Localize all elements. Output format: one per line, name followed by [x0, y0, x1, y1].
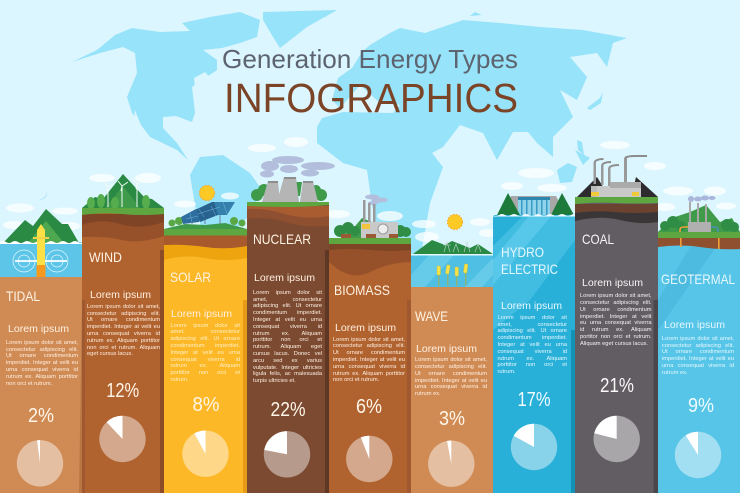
text block: Integer at velit eu urna: [498, 342, 567, 348]
text block: rutrum ex. Aliquam porttitor: [333, 371, 405, 377]
text block: Lorem ipsum dolor sit amet,: [580, 293, 652, 299]
text block: imperdiet. Integer at velit eu: [662, 356, 734, 362]
text block: [6, 340, 78, 387]
panel: coal: [575, 155, 658, 493]
pie chart 22%: [264, 431, 310, 477]
label: WAVE: WAVE: [415, 308, 448, 324]
text block: [415, 357, 487, 397]
text block: [662, 336, 734, 376]
label: WIND: WIND: [89, 249, 122, 265]
text block: Lorem ipsum dolor sit amet,: [333, 337, 405, 343]
text block: turpis ultricies et.: [253, 378, 296, 384]
soil layers: [82, 208, 164, 493]
text block: consectetur adipiscing elit.: [662, 343, 734, 349]
text block: imperdiet. Integer at velit: [580, 314, 652, 320]
percentage: 22%: [270, 399, 306, 421]
text block: eu urna consequat viverra: [580, 320, 652, 326]
text block: ligula felis, ac malesuada: [253, 371, 322, 377]
pie chart 12%: [99, 416, 146, 462]
heading: Generation Energy Types: Generation Energy Types: [222, 44, 518, 74]
text block: Integer at velit eu urna: [170, 350, 240, 356]
soil layers: [575, 197, 658, 493]
text block: consectetur adipiscing elit.: [6, 347, 78, 353]
text block: rutrum ex. Aliquam porttitor: [6, 374, 78, 380]
panel: wind: [82, 174, 164, 493]
scene: sun, hills, water and wave buoys: [411, 214, 493, 287]
text block: Ut ornare condimentum: [415, 371, 487, 377]
text block: amet, consectetur: [253, 297, 322, 303]
subheading: Lorem ipsum: [254, 272, 315, 284]
pie chart 17%: [511, 424, 557, 470]
pie chart 3%: [428, 440, 474, 487]
text block: consectetur adipiscing elit.: [415, 364, 487, 370]
text block: Lorem ipsum dolor sit amet,: [6, 340, 78, 346]
subheading: Lorem ipsum: [416, 343, 477, 355]
title: [222, 44, 518, 121]
label: ELECTRIC: ELECTRIC: [501, 261, 558, 277]
text block: imperdiet. Integer at velit eu: [6, 360, 78, 366]
panel: geothermal: [658, 196, 740, 493]
text block: id rutrum ex. Aliquam: [580, 327, 652, 333]
text block: arcu sed ex varius: [253, 358, 322, 364]
text block: cursus lacus. Donec vel: [253, 351, 322, 357]
percentage: 6%: [356, 396, 382, 418]
pie chart 9%: [675, 432, 721, 478]
text block: rutrum ex.: [662, 370, 688, 376]
pie chart 8%: [182, 430, 229, 477]
clouds: [3, 137, 736, 242]
panel: biomass: [329, 194, 411, 493]
text block: condimentum imperdiet.: [253, 310, 322, 316]
text block: rutrum.: [170, 377, 189, 383]
text block: condimentum imperdiet.: [170, 343, 240, 349]
text block: consectetur adipiscing elit.: [580, 300, 652, 306]
scene: mountain and wind turbines: [82, 174, 164, 209]
text block: vulputate. Integer ultricies: [253, 365, 322, 371]
text block: Ut ornare condimentum: [333, 350, 405, 356]
text block: Lorem ipsum dolor sit amet,: [662, 336, 734, 342]
subheading: Lorem ipsum: [171, 308, 232, 320]
text block: Ut ornare condimentum: [662, 349, 734, 355]
text block: rutrum ex. Aliquam: [170, 363, 240, 369]
text block: rutrum ex. Aliquam: [498, 356, 567, 362]
text block: consectetur adipiscing elit.: [87, 311, 160, 317]
text block: urna consequat viverra id: [415, 384, 487, 390]
text block: consequat viverra id: [170, 357, 240, 363]
text block: urna consequat viverra id: [87, 331, 160, 337]
text block: Lorem ipsum dolor sit: [253, 290, 322, 296]
ground: [411, 287, 493, 493]
text block: rutrum ex.: [415, 391, 441, 397]
percentage: 2%: [28, 405, 54, 427]
text block: Integer at velit eu urna: [253, 317, 322, 323]
text block: adipiscing elit. Ut ornare: [253, 303, 322, 309]
text block: imperdiet. Integer at velit eu: [333, 357, 405, 363]
subheading: Lorem ipsum: [8, 323, 69, 335]
text block: rutrum ex. Aliquam porttitor: [87, 338, 160, 344]
percentage: 17%: [518, 389, 551, 411]
text block: eget cursus lacus.: [87, 351, 133, 357]
text block: consequat viverra id: [253, 324, 322, 330]
panel: nuclear: [247, 156, 335, 493]
panel: tidal: [0, 209, 82, 493]
text block: [87, 304, 160, 357]
heading: INFOGRAPHICS: INFOGRAPHICS: [224, 75, 518, 121]
ground: [0, 277, 82, 493]
text block: Lorem ipsum dolor sit: [170, 323, 240, 329]
pie chart 6%: [346, 436, 392, 482]
text block: [170, 323, 240, 383]
pie chart 2%: [17, 440, 63, 486]
text block: rutrum ex. Aliquam: [253, 331, 322, 337]
text block: rutrum. Aliquam eget: [253, 344, 322, 350]
text block: Ut ornare condimentum: [580, 307, 652, 313]
text block: porttitor non orci et: [498, 362, 567, 368]
percentage: 3%: [439, 408, 465, 430]
subheading: Lorem ipsum: [582, 277, 643, 289]
soil layers: [247, 202, 329, 493]
scene: mountains and tidal turbine: [0, 209, 82, 277]
soil layers: [329, 238, 411, 493]
percentage: 9%: [688, 395, 714, 417]
text block: portitor non orci et rutrum.: [580, 334, 652, 340]
text block: Lorem ipsum dolor sit amet,: [87, 304, 160, 310]
text block: urna consequat viverra id: [333, 364, 405, 370]
crescent moon: [38, 191, 47, 200]
text block: rutrum.: [498, 369, 516, 375]
scene: geothermal plant and hills: [658, 196, 740, 248]
subheading: Lorem ipsum: [335, 322, 396, 334]
text block: porttitor non orci et: [170, 370, 240, 376]
panel: wave: [411, 214, 493, 493]
text block: Ut ornare condimentum: [87, 317, 160, 323]
percentage: 8%: [192, 394, 220, 416]
subheading: Lorem ipsum: [501, 300, 562, 312]
text block: [580, 293, 652, 347]
soil layers: [164, 229, 247, 493]
scene: coal plant and chimneys: [577, 156, 658, 197]
scene: sun, trees and solar panels: [164, 186, 247, 229]
text block: consectetur adipiscing elit.: [333, 343, 405, 349]
label: SOLAR: SOLAR: [170, 269, 211, 285]
text block: imperdiet. Integer at velit eu: [415, 378, 487, 384]
text block: non orci et rutrum.: [333, 377, 379, 383]
subheading: Lorem ipsum: [90, 289, 151, 301]
panel: solar: [164, 184, 247, 493]
label: NUCLEAR: NUCLEAR: [253, 231, 311, 247]
text block: non orci et rutrum.: [6, 381, 52, 387]
text block: condimentum imperdiet.: [498, 335, 567, 341]
text block: amet, consectetur: [170, 329, 240, 335]
text block: [498, 315, 568, 375]
text block: Lorem ipsum dolor sit: [498, 315, 567, 321]
label: BIOMASS: BIOMASS: [334, 282, 390, 298]
scene: biomass plant and trees: [334, 194, 411, 238]
soil and water layers: [658, 232, 740, 493]
text block: urna consequat viverra id: [662, 363, 734, 369]
text block: Lorem ipsum dolor sit amet,: [415, 357, 487, 363]
water column: [493, 214, 575, 493]
text block: imperdiet. Integer at velit eu: [87, 324, 160, 330]
scene: cooling towers and steam: [251, 156, 335, 202]
text block: porttitor non orci et: [253, 337, 322, 343]
percentage: 12%: [106, 380, 139, 402]
text block: consequat viverra id: [498, 349, 567, 355]
percentage: 21%: [600, 375, 634, 397]
label: COAL: COAL: [582, 231, 614, 247]
text block: urna consequat viverra id: [6, 367, 78, 373]
scene: dam and hills: [497, 193, 574, 215]
label: HYDRO: HYDRO: [501, 244, 544, 260]
text block: Aliquam eget cursus lacus.: [580, 341, 648, 347]
text block: amet, consectetur: [498, 322, 567, 328]
subheading: Lorem ipsum: [664, 319, 725, 331]
text block: adipiscing elit. Ut ornare: [170, 336, 240, 342]
panel: hydro electric: [493, 193, 575, 493]
text block: non orci et rutrum. Aliquam: [87, 345, 160, 351]
text block: adipiscing elit. Ut ornare: [498, 328, 567, 334]
text block: Ut ornare condimentum: [6, 353, 78, 359]
text block: [333, 337, 405, 383]
label: TIDAL: TIDAL: [6, 288, 40, 304]
text block: [253, 290, 322, 384]
pie chart 21%: [594, 416, 640, 462]
